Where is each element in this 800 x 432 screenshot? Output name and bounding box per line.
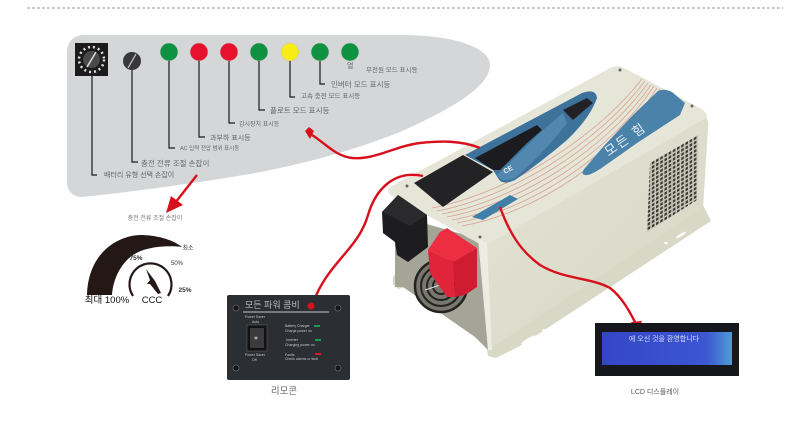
indicator labels: AC 입력 전압 범위 표시등 [180,144,239,152]
switch labels [245,315,266,362]
model label [582,90,685,175]
LCD display [595,323,739,376]
top face [388,66,707,244]
switch labels: Power Saver [245,315,266,319]
status labels: Check alarms or fault [285,357,318,361]
gauge heading: 충전 전류 조절 손잡이 [128,214,182,222]
indicator labels: 고속 충전 모드 표시등 [301,91,360,100]
switch labels: Power Saver [245,353,266,357]
indicator labels: 인버터 모드 표시등 [331,79,390,89]
indicator labels: 열 [347,62,353,70]
indicator labels [104,62,417,179]
fan [415,260,467,312]
gauge scale labels: 75% [129,255,143,262]
indicator labels: 충전 전류 조절 손잡이 [141,158,209,168]
red DC connector [428,228,477,297]
arrow: to charge gauge [166,175,197,213]
black AC connector [382,195,428,262]
status LEDs [314,325,321,355]
control panel [414,155,493,207]
model name: 모든 힘 [602,120,649,159]
LCD slot [472,195,518,220]
status labels: Charge power on [285,329,312,333]
ventilation grille [647,135,698,232]
indicator labels: 무전원 모드 표시등 [366,65,417,74]
status labels: Battery Charger [285,324,311,328]
red pinstripes [432,79,660,226]
screws [233,305,341,371]
status labels: Charging power on [285,343,315,347]
charge gauge [85,235,194,306]
inverter unit [382,66,711,358]
cable: remote callout [306,175,423,309]
LCD message: 에 오신 것을 환영합니다 [629,334,700,343]
remote control [227,295,350,380]
indicator labels: 배터리 유형 선택 손잡이 [104,170,174,179]
indicator labels: 플로트 모드 표시등 [270,106,329,115]
indicator lights [160,43,359,61]
gauge scale labels: CCC [142,295,162,306]
LCD caption: LCD 디스플레이 [631,387,679,396]
status labels: Inverter [286,338,299,342]
gauge crescent [87,235,182,295]
gauge scale labels [85,244,194,306]
remote caption: 리모콘 [271,386,297,397]
icon: battery type dial [75,43,108,76]
gauge scale labels: 최대 100% [85,295,130,306]
LCD screen [602,332,732,365]
front face [485,117,708,350]
indicator labels: 감시장치 표시등 [239,120,280,128]
gauge scale labels: 50% [171,261,184,267]
side face [395,215,488,350]
remote title: 모든 파워 콤비 [245,300,300,310]
gauge scale labels: 최소 [182,244,194,252]
indicator window [475,125,542,170]
indicator labels: 과부하 표시등 [210,133,251,142]
remote body [227,295,350,380]
screws [406,68,694,238]
switch labels: Auto [252,320,259,324]
leader lines [92,61,325,175]
blue label strip [465,91,597,183]
display window [563,98,593,120]
cable: LCD callout [500,207,642,332]
mounting flange [393,205,711,358]
status labels [285,324,318,361]
rounded corner highlight [478,238,492,350]
gauge needle [146,269,161,294]
LCD bezel [595,323,739,376]
switch labels: Off [252,358,257,362]
status labels: Faults [285,353,295,357]
gauge scale labels: 25% [178,287,192,294]
power switch [247,325,267,351]
panel: indicator legend [67,35,490,197]
icon: charge current knob [123,52,141,70]
CE mark: CE [502,165,515,176]
remote connector dot [308,302,314,310]
cable: panel callout [305,127,480,158]
gauge dial arc [130,263,172,296]
light blue swoosh [497,113,567,180]
